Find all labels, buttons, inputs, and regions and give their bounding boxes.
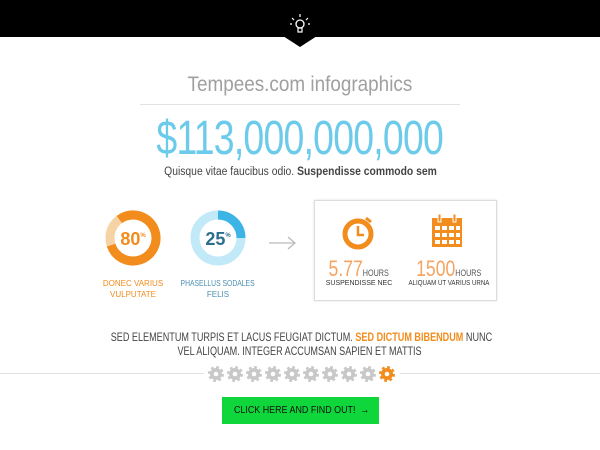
donut: 25%: % (225, 233, 231, 239)
donut: 80% (103, 210, 163, 299)
donut: 80%: VULPUTATE (110, 290, 156, 299)
panel: stats box (314, 200, 497, 301)
stat: 1500 hours: ALIQUAM UT VARIUS URNA (409, 280, 489, 287)
icon: stopwatch (342, 216, 374, 250)
header bar (0, 0, 600, 37)
subtitle: Quisque vitae faucibus odio. Suspendisse commodo sem (164, 166, 436, 178)
stat: 5.77 hours: 5.77HOURS (329, 256, 389, 281)
gear rating row (204, 366, 400, 382)
donut: 25%: PHASELLUS SODALES (181, 279, 255, 288)
donut: 25% (181, 210, 255, 299)
button (222, 397, 379, 424)
stat: 1500 hours (408, 256, 490, 287)
stat: 1500 hours: 1500HOURS (416, 256, 482, 281)
donut: 25%: 25 (205, 229, 225, 249)
text block: VEL ALIQUAM. INTEGER ACCUMSAN SAPIEN ET MATTIS (178, 346, 422, 358)
icon: calendar (432, 214, 462, 247)
donut: 80%: % (140, 233, 146, 239)
text block: SED ELEMENTUM TURPIS ET LACUS FEUGIAT DICTUM. SED DICTUM BIBENDUM NUNC (111, 332, 492, 344)
title: Tempees.com infographics (188, 73, 412, 96)
text block (111, 332, 492, 358)
big number: $113,000,000,000 (157, 112, 443, 165)
icon: notch with lightbulb (284, 14, 316, 47)
button: CLICK HERE AND FIND OUT! → (234, 404, 369, 416)
donut: 80%: DONEC VARIUS (103, 279, 163, 288)
donut: 25%: FELIS (207, 290, 229, 299)
donut: 80%: 80 (120, 229, 140, 249)
arrow (269, 236, 296, 250)
stat: 5.77 hours: SUSPENDISSE NEC (326, 280, 392, 287)
